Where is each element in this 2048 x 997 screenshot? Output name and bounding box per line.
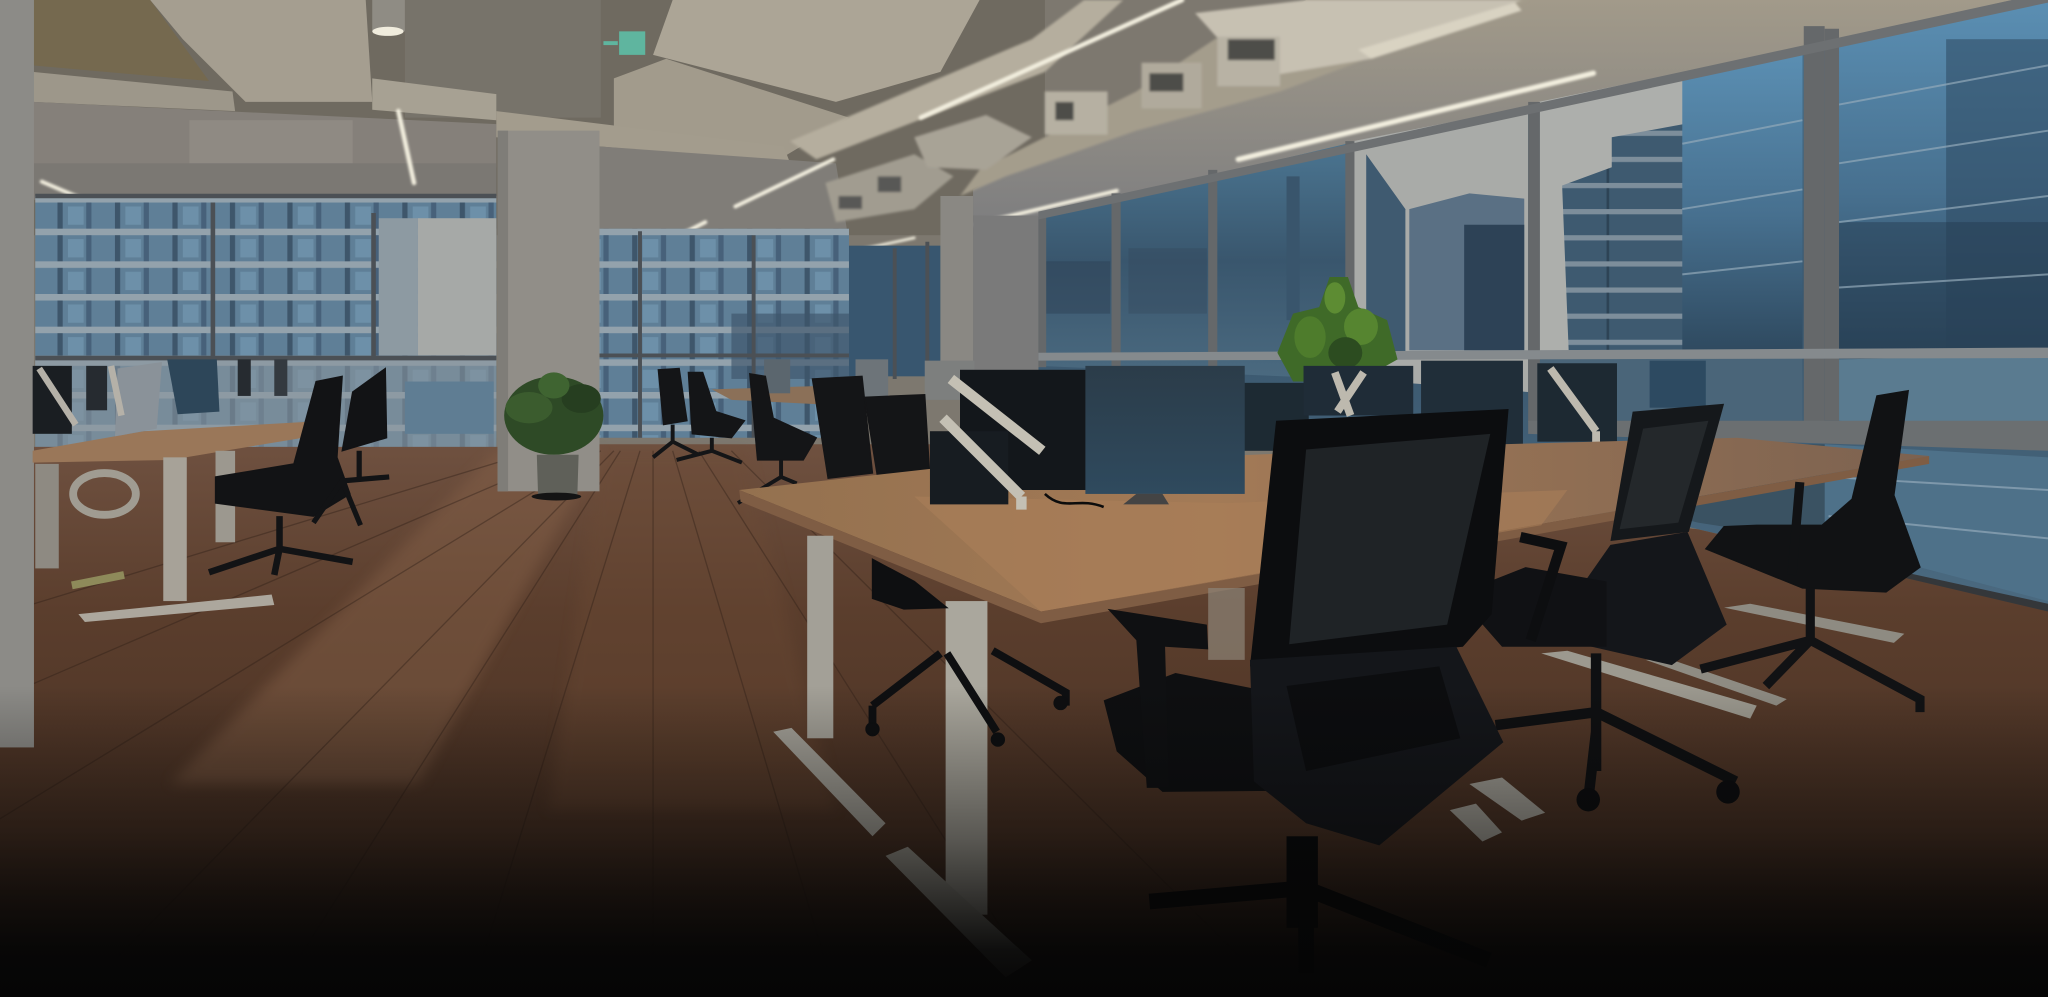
chair under desk bbox=[866, 559, 1067, 746]
ceiling lights bbox=[42, 0, 1593, 253]
windows: left back wall bbox=[35, 196, 496, 447]
large foreground office chair bbox=[1104, 409, 1509, 973]
windows: right wall glazing bbox=[1038, 0, 2048, 612]
left desk cluster bbox=[33, 359, 327, 622]
dark fade toward the bottom bbox=[0, 686, 2048, 997]
far desks and chairs bbox=[653, 359, 974, 503]
far right monitors bbox=[1241, 361, 1706, 452]
main desk monitors bbox=[930, 366, 1245, 510]
window frames and mullions bbox=[1038, 0, 2048, 619]
pendant cylinder lamp bbox=[372, 0, 405, 36]
main desk bbox=[739, 438, 1929, 977]
large plant behind desk bbox=[1277, 277, 1398, 382]
far right office chair bbox=[1701, 391, 1920, 712]
middle office chair bbox=[1456, 404, 1740, 811]
potted plant: centre bbox=[504, 372, 603, 500]
ceiling ducts and vents bbox=[790, 0, 1528, 222]
exit sign bbox=[603, 31, 645, 55]
right wall above windows bbox=[973, 0, 2048, 217]
floor bbox=[0, 444, 2048, 997]
back walls below the ceiling bbox=[33, 146, 849, 242]
right pillar bbox=[940, 196, 1038, 372]
left pillar bbox=[0, 0, 34, 747]
left office chairs bbox=[209, 368, 389, 575]
centre pillar bbox=[498, 131, 600, 491]
windows: centre back wall bbox=[598, 229, 940, 438]
